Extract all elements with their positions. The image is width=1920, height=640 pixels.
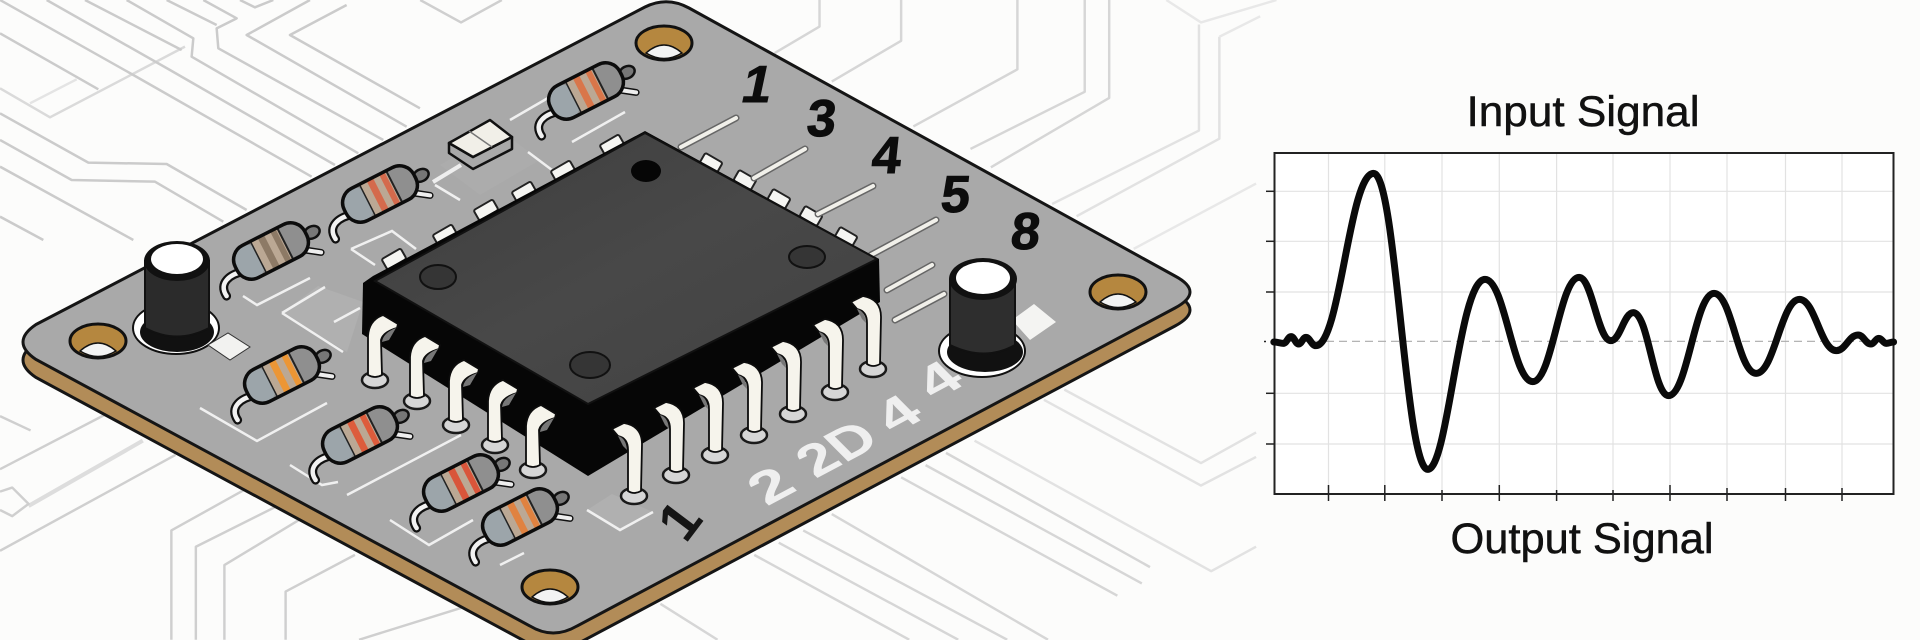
background circuit traces: [0, 0, 1276, 640]
pin numbers: white board labels: 4: [902, 351, 975, 409]
mounting holes: [70, 26, 1146, 604]
chart caption: output signal: Output Signal: [1450, 515, 1714, 563]
pin numbers: white board labels: [645, 351, 975, 552]
panel: circuit board: [23, 2, 1190, 640]
pin numbers: black labels: [737, 56, 1043, 261]
pin numbers: white board labels: 4: [861, 385, 934, 443]
pin numbers: white board labels: 1: [645, 489, 714, 552]
right capacitor: [939, 258, 1056, 377]
chip package: [362, 131, 880, 476]
chip pins: left row: [362, 315, 556, 478]
chart frame: [1274, 153, 1894, 494]
board edge: copper side: [23, 20, 1190, 640]
chip pins: right row: [612, 296, 886, 504]
back edge chip pads: [381, 134, 858, 270]
pin numbers: black labels: 1: [737, 56, 778, 114]
pin numbers: black labels: 8: [1008, 203, 1043, 261]
panel: signal chart: [1264, 88, 1894, 563]
pin numbers: black labels: 3: [804, 90, 839, 148]
pin numbers: black labels: 5: [938, 166, 973, 224]
board printed white traces: [200, 98, 653, 565]
signal waveform: [1274, 173, 1894, 469]
pin numbers: black labels: 4: [869, 127, 904, 185]
chart axis ticks: [1264, 191, 1842, 501]
pin numbers: white board labels: 2: [734, 457, 807, 515]
diode component: [433, 120, 512, 182]
chart plot area: [1274, 153, 1894, 494]
resistors: [209, 51, 644, 566]
pin leader traces: [681, 118, 944, 320]
chart grid: [1274, 153, 1893, 494]
board lighter patches: [282, 130, 653, 530]
left capacitor: [133, 241, 250, 360]
board top surface: [23, 2, 1190, 633]
pin numbers: white board labels: 2D: [783, 411, 890, 487]
chart title: input signal: Input Signal: [1466, 88, 1700, 136]
